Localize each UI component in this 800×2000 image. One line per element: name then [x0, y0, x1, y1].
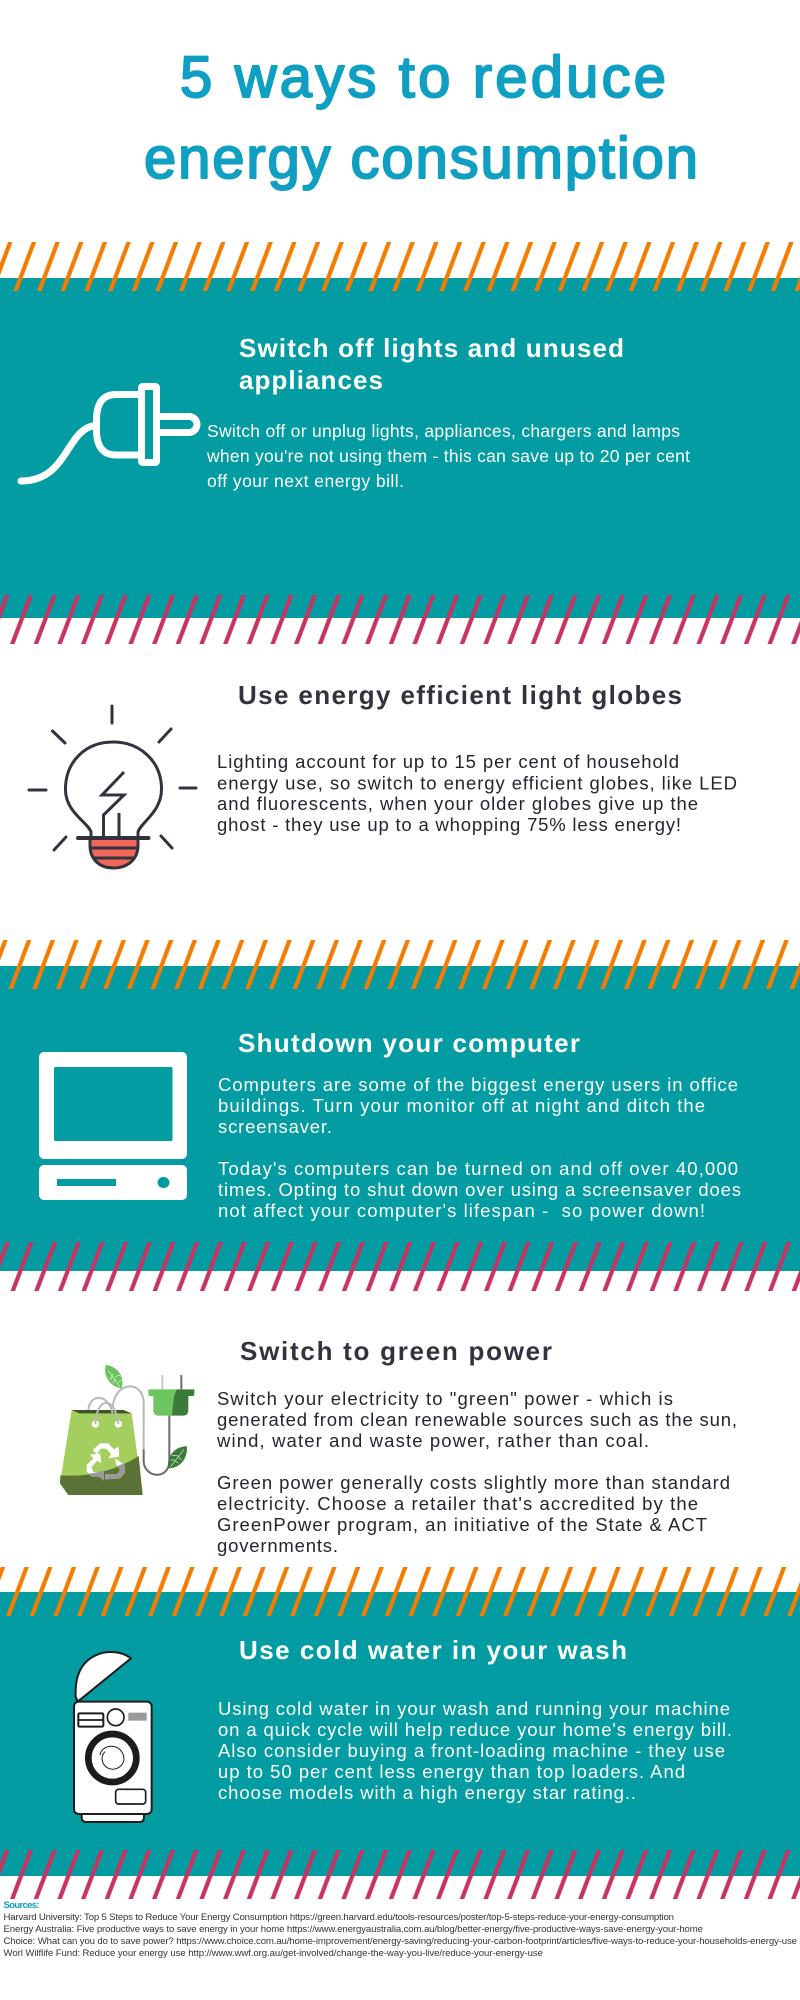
text block: Also consider buying a front-loading machine - they use	[218, 1740, 725, 1761]
sources: Choice: What can you do to save power? https://www.choice.com.au/home-improvement/energy-saving/reducing-your-carbon-footprint/articles/five-ways-to-reduce-your-households-energy-use	[4, 1936, 797, 1947]
icon: plug	[21, 386, 197, 481]
text block: Today's computers can be turned on and off over 40,000	[218, 1158, 738, 1179]
text block: GreenPower program, an initiative of the State & ACT	[217, 1514, 707, 1535]
text block: Switch off or unplug lights, appliances, chargers and lamps	[207, 421, 680, 441]
heading: Use cold water in your wash	[239, 1635, 627, 1665]
text block: wind, water and waste power, rather than coal.	[216, 1430, 649, 1451]
text block: ghost - they use up to a whopping 75% less energy!	[217, 814, 681, 835]
text block: up to 50 per cent less energy than top loaders. And	[218, 1761, 685, 1782]
text block: screensaver.	[218, 1116, 332, 1137]
icon: computer	[39, 1052, 187, 1200]
sources: Harvard University: Top 5 Steps to Reduce Your Energy Consumption https://green.harvard.edu/tools-resources/poster/top-5-steps-reduce-your-energy-consumption	[4, 1912, 674, 1923]
heading: Switch to green power	[240, 1336, 552, 1366]
text block: buildings. Turn your monitor off at night and ditch the	[218, 1095, 705, 1116]
text block	[216, 1388, 737, 1556]
sources: Worl Wilflife Fund: Reduce your energy use http://www.wwf.org.au/get-involved/change-the-way-you-live/reduce-your-energy-use	[4, 1948, 543, 1959]
panel: shutdown computer	[0, 940, 800, 1291]
text block: governments.	[217, 1535, 338, 1556]
text block: energy use, so switch to energy efficient globes, like LED	[217, 772, 737, 794]
title: 5 ways to reduce	[180, 45, 666, 110]
text block	[217, 751, 737, 835]
heading: appliances	[239, 365, 383, 395]
panel: light globes	[29, 680, 737, 868]
text block: choose models with a high energy star rating..	[218, 1782, 636, 1803]
text block	[206, 421, 690, 491]
icon: green bag and plug	[60, 1365, 194, 1495]
heading	[239, 333, 624, 395]
text block: Lighting account for up to 15 per cent of household	[217, 751, 679, 772]
sources: Sources:	[4, 1900, 40, 1911]
text block	[218, 1074, 741, 1221]
bag	[60, 1410, 143, 1495]
heading: Use energy efficient light globes	[238, 680, 682, 710]
text block: off your next energy bill.	[207, 471, 404, 491]
recycle symbol	[87, 1443, 125, 1479]
text block: Green power generally costs slightly more than standard	[217, 1472, 730, 1493]
text block: on a quick cycle will help reduce your home's energy bill.	[218, 1719, 732, 1740]
panel: cold water wash	[0, 1567, 800, 1899]
sources: Energy Australia: Five productive ways to save energy in your home https://www.energyaustralia.com.au/blog/better-energy/five-productive-ways-save-energy-your-home	[4, 1924, 703, 1935]
text block: and fluorescents, when your older globes give up the	[217, 793, 698, 814]
icon: light bulb	[29, 706, 196, 868]
panel: switch off lights	[0, 242, 800, 644]
text block	[218, 1698, 732, 1803]
text block: Computers are some of the biggest energy users in office	[218, 1074, 738, 1095]
handles and cord	[88, 1386, 144, 1450]
text block: Switch your electricity to "green" power - which is	[217, 1388, 673, 1409]
text block: electricity. Choose a retailer that's accredited by the	[217, 1493, 698, 1514]
icon: washing machine	[74, 1652, 152, 1822]
title	[144, 45, 698, 191]
text block: times. Opting to shut down over using a screensaver does	[218, 1179, 741, 1200]
heading: Switch off lights and unused	[239, 333, 624, 363]
text block: Using cold water in your wash and running your machine	[218, 1698, 730, 1719]
text block: not affect your computer's lifespan - so power down!	[218, 1200, 705, 1221]
leaves	[105, 1365, 123, 1388]
title: energy consumption	[144, 126, 698, 191]
sources	[4, 1900, 797, 1959]
text block: generated from clean renewable sources such as the sun,	[217, 1409, 737, 1430]
plug	[159, 1375, 165, 1389]
text block: when you're not using them - this can save up to 20 per cent	[206, 446, 690, 466]
panel: green power	[60, 1336, 737, 1556]
heading: Shutdown your computer	[238, 1028, 580, 1058]
